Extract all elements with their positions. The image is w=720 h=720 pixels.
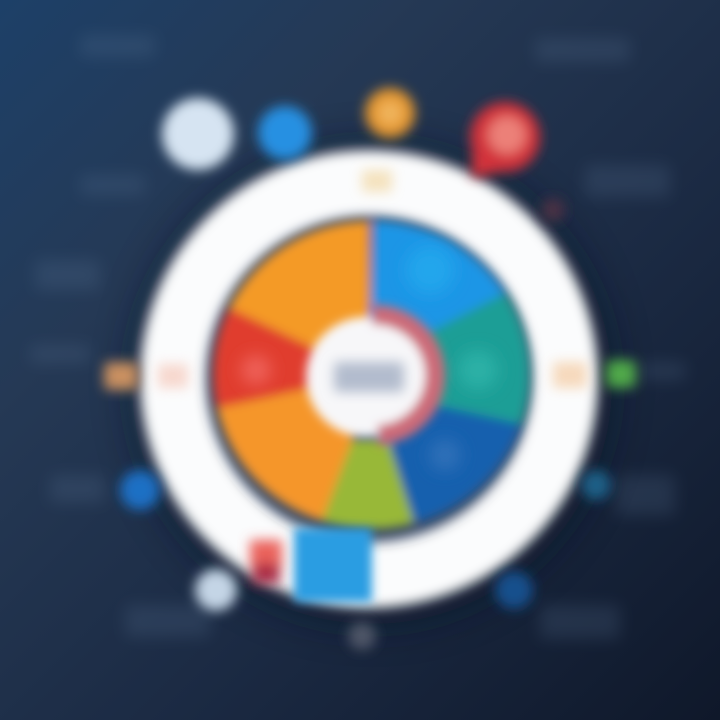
icon: light lower left xyxy=(195,569,237,611)
white outer ring xyxy=(173,183,565,575)
ring markers xyxy=(158,170,587,388)
slice: teal right xyxy=(370,293,529,424)
red ring segment xyxy=(250,540,282,584)
faint text labels xyxy=(30,35,685,639)
center ring xyxy=(306,315,435,437)
slice: green bottom xyxy=(322,440,414,529)
icon: navy lower right xyxy=(495,571,533,609)
icon: orange circle xyxy=(365,88,415,138)
icon: blue lower left xyxy=(120,470,160,510)
icon: orange square xyxy=(104,362,138,390)
pie chart xyxy=(213,221,529,529)
icon: light circle xyxy=(162,98,234,170)
disc behind pie xyxy=(196,200,546,550)
icon: teal lower right xyxy=(581,470,611,500)
slice highlights xyxy=(241,246,498,471)
icon: dark red dot xyxy=(541,198,565,222)
icon: green square xyxy=(606,360,636,388)
slice: red left xyxy=(213,308,370,408)
blue ring segment xyxy=(294,528,372,602)
slice: blue upper right xyxy=(370,221,505,375)
ring shadow xyxy=(132,144,612,624)
icon: blue circle xyxy=(258,106,312,160)
slice: orange upper left xyxy=(229,221,370,375)
slice: orange lower left xyxy=(217,375,370,521)
icon: red circle xyxy=(470,102,540,178)
icon: muted bottom xyxy=(348,622,376,650)
center label xyxy=(334,362,404,392)
slice: dark blue lower right xyxy=(370,375,521,523)
